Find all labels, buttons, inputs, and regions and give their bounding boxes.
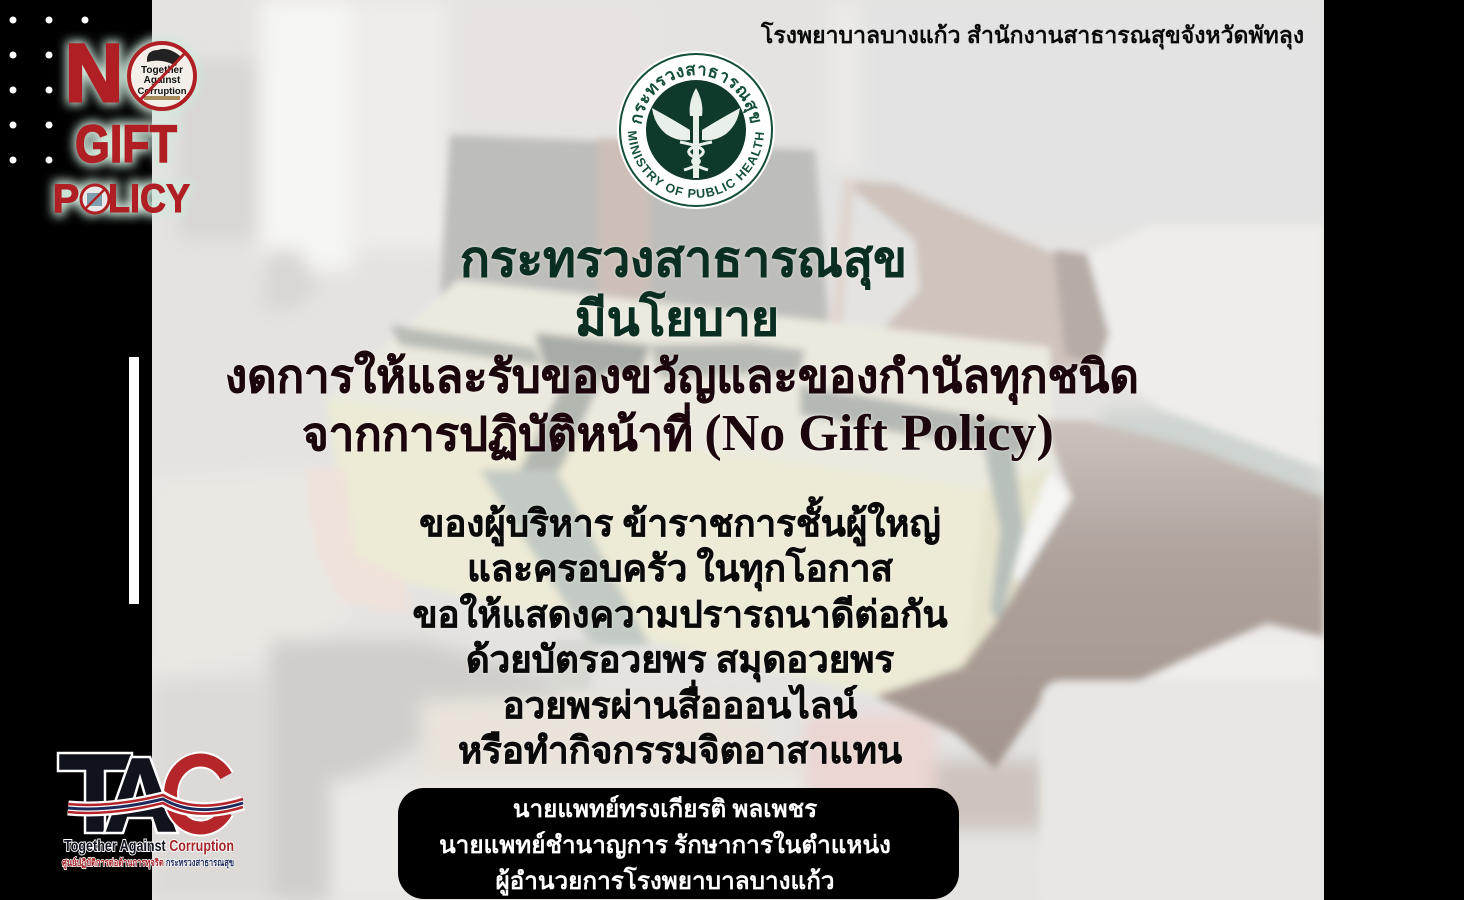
logo: No Gift Policy: LICY (108, 177, 190, 221)
logo: No Gift Policy: N (65, 28, 123, 119)
gift box front (326, 400, 985, 715)
ribbon (390, 325, 540, 365)
logo: No Gift Policy: Corruption (137, 86, 187, 97)
heading line 3: งดการให้และรับของขวัญและของกำนัลทุกชนิด (225, 352, 1139, 402)
title: policy heading (225, 232, 1139, 462)
body message: ของผู้บริหาร ข้าราชการชั้นผู้ใหญ่ (419, 503, 941, 544)
body message: หรือทำกิจกรรมจิตอาสาแทน (458, 730, 902, 771)
upper hand sleeve (1087, 225, 1324, 470)
gift box top (326, 280, 1054, 500)
logo: TAC Together Against Corruption (56, 752, 246, 870)
logo: No Gift Policy: Against (144, 75, 181, 86)
logo: TAC Together Against Corruption: Together Against Corruption (64, 838, 234, 855)
dark book behind gift (440, 135, 830, 340)
logo: No Gift Policy: Together (141, 65, 183, 76)
logo: No Gift Policy: N (65, 28, 123, 119)
logo: No Gift Policy: GIFT (75, 115, 177, 174)
body message (412, 496, 948, 771)
body message: อวยพรผ่านสื่อออนไลน์ (503, 685, 857, 726)
heading line 4: จากการปฏิบัติหน้าที่ (No Gift Policy) (302, 405, 1054, 462)
hospital name header: โรงพยาบาลบางแก้ว สำนักงานสาธารณสุขจังหวัดพัทลุง (761, 22, 1304, 48)
left hand (305, 470, 408, 612)
body message: ด้วยบัตรอวยพร สมุดอวยพร (466, 639, 894, 680)
decorative white dot grid (10, 16, 88, 164)
director name and title: นายแพทย์ชำนาญการ รักษาการในตำแหน่ง (439, 832, 891, 859)
logo: No Gift Policy: GIFT (75, 115, 177, 174)
body message: และครอบครัว ในทุกโอกาส (467, 548, 893, 589)
white vertical bar (129, 357, 139, 604)
director name and title: นายแพทย์ทรงเกียรติ พลเพชร (513, 796, 817, 823)
upper hand (843, 180, 1109, 371)
heading line 1: กระทรวงสาธารณสุข (460, 232, 907, 287)
body message: ขอให้แสดงความปรารถนาดีต่อกัน (412, 594, 948, 635)
director name and title: ผู้อำนวยการโรงพยาบาลบางแก้ว (495, 868, 835, 895)
heading line 2: มีนโยบาย (575, 293, 779, 346)
logo: No Gift Policy: POLICY (54, 177, 190, 221)
black left panel (0, 0, 152, 900)
logo: Ministry of Public Health seal (617, 51, 775, 209)
right hand (875, 420, 1324, 769)
translucent rounded panel (1041, 681, 1331, 900)
logo: No Gift Policy (44, 28, 202, 224)
logo: Ministry of Public Health seal: MINISTRY OF PUBLIC HEALTH (628, 131, 764, 198)
director name and title (439, 795, 891, 896)
signature box: hospital director (398, 788, 959, 899)
black right panel (1324, 0, 1464, 900)
logo: Ministry of Public Health seal: กระทรวงสาธารณสุข (632, 64, 760, 124)
logo: No Gift Policy: P (53, 177, 79, 221)
